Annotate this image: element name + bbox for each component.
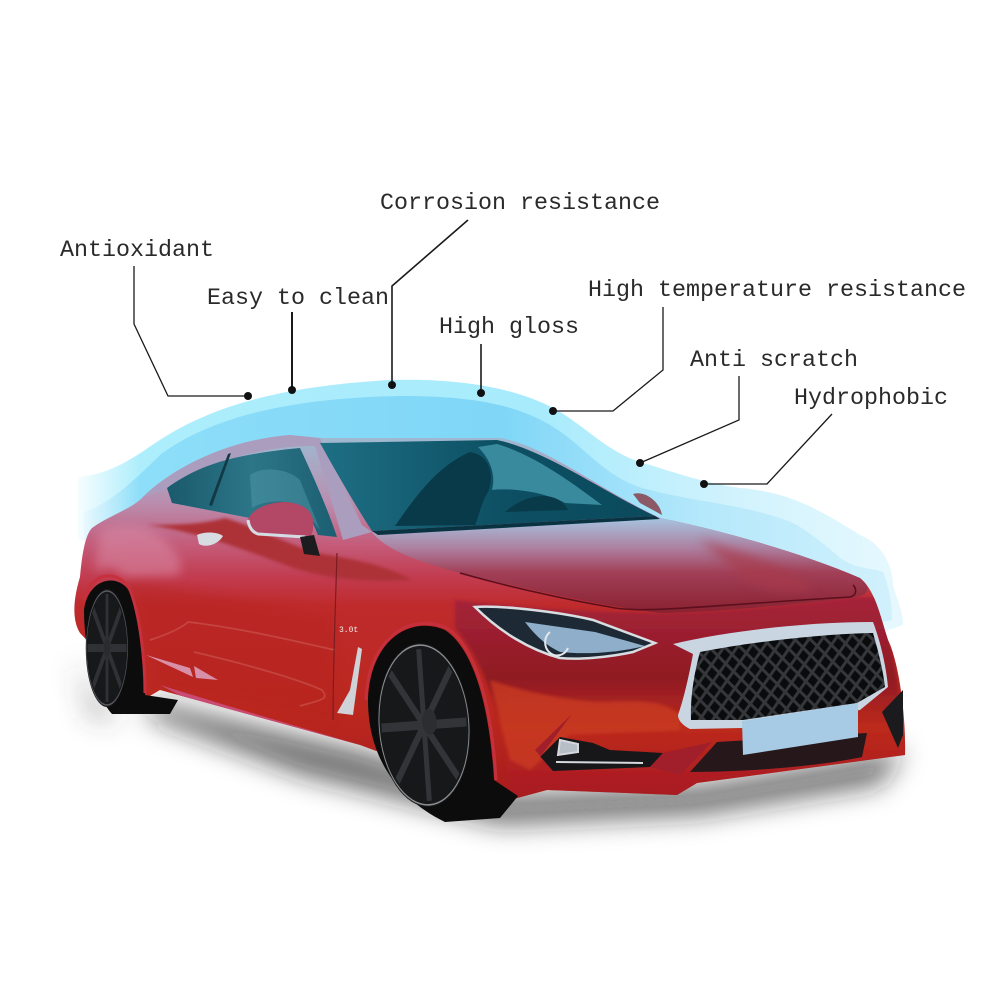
side mirror — [248, 502, 313, 536]
callout leader lines — [134, 220, 832, 484]
car — [74, 435, 905, 822]
chrome grille frame — [673, 622, 888, 729]
door dark reflection band — [147, 518, 412, 581]
face — [455, 597, 905, 800]
fog light pocket — [540, 737, 663, 771]
windshield right pane — [478, 444, 602, 505]
headlight inner — [525, 622, 645, 653]
badge: 3.0t — [339, 626, 358, 635]
sill stripe — [160, 685, 360, 745]
label: High temperature resistance: High temperature resistance — [588, 277, 966, 303]
label: High gloss: High gloss — [439, 314, 579, 340]
door handle — [197, 532, 223, 546]
label: Antioxidant: Antioxidant — [60, 237, 214, 263]
window pillar — [209, 453, 231, 506]
seats in cabin — [395, 452, 568, 526]
label: Anti scratch: Anti scratch — [690, 347, 858, 373]
windshield — [320, 440, 655, 531]
grille mesh — [691, 633, 885, 720]
headlight — [475, 607, 655, 659]
body reflections — [95, 517, 905, 800]
callout dots — [244, 381, 708, 488]
front tyre — [368, 626, 518, 822]
rear tyre — [84, 580, 178, 714]
licence plate — [742, 703, 858, 755]
rear arch lip — [84, 576, 145, 693]
door shut line — [333, 553, 337, 720]
mirror stem — [300, 535, 320, 556]
front arch lip — [366, 623, 496, 780]
label: Hydrophobic: Hydrophobic — [794, 385, 948, 411]
rear quarter glow — [95, 525, 180, 578]
label: Corrosion resistance: Corrosion resistance — [380, 190, 660, 216]
right mirror — [633, 493, 662, 515]
right intake — [882, 690, 903, 748]
hood — [372, 517, 867, 613]
front lower left reflection — [490, 680, 680, 770]
A pillar and roof — [143, 435, 372, 540]
side vent — [337, 647, 362, 715]
lower front grille — [690, 733, 867, 772]
windshield base strip — [372, 516, 660, 535]
fog light surround — [535, 714, 712, 775]
front wheel — [372, 640, 476, 810]
rear skirt highlight — [146, 655, 193, 677]
coating shield layers — [70, 380, 903, 640]
hood right sheen — [702, 538, 794, 588]
hood shut line — [460, 573, 856, 610]
door lower reflections — [150, 622, 335, 706]
rear wheel — [86, 589, 128, 707]
ground shadow — [75, 660, 905, 825]
door lower darker tone — [128, 579, 334, 707]
fog light chrome — [556, 740, 643, 763]
car body — [74, 435, 905, 800]
infographic: car coating benefits — [60, 192, 964, 844]
side windows — [167, 448, 337, 537]
label: Easy to clean: Easy to clean — [207, 285, 389, 311]
mirror chrome — [248, 520, 305, 537]
window interior light — [250, 470, 320, 530]
